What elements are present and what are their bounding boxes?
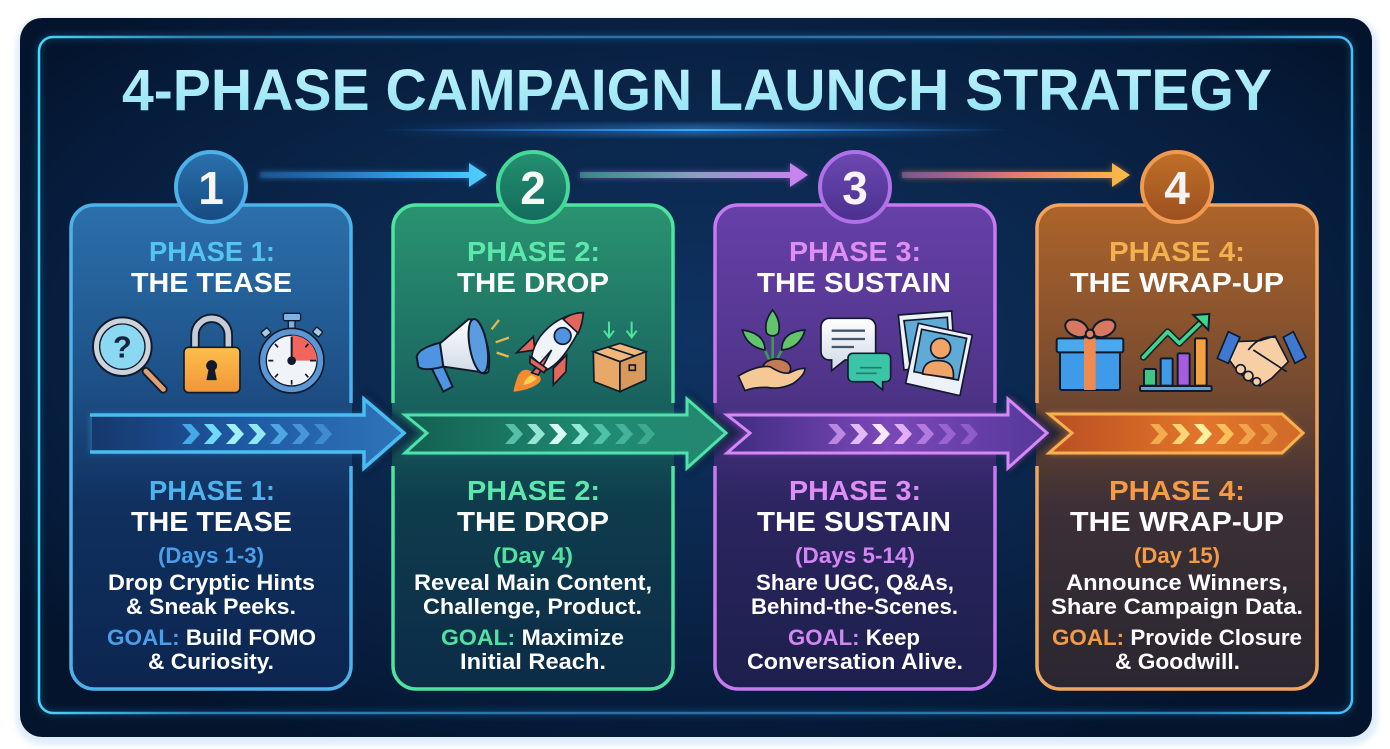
phase 1 details: GOAL: Build FOMO bbox=[107, 625, 316, 650]
icon: handshake bbox=[1217, 332, 1306, 386]
badge 3 bbox=[820, 152, 890, 222]
arrow band 2 bbox=[403, 392, 740, 476]
phase 4 details: PHASE 4: bbox=[1109, 475, 1245, 506]
phase 4 details: (Day 15) bbox=[1134, 543, 1220, 568]
phase 3 details: GOAL: Keep bbox=[788, 625, 920, 650]
panel: phase 1 bbox=[70, 152, 418, 690]
phase 3 details: Share UGC, Q&As, bbox=[756, 570, 954, 595]
phase 1 details: THE TEASE bbox=[131, 506, 292, 537]
phase 2 details: PHASE 2: bbox=[467, 475, 600, 506]
icon: gift bbox=[1057, 316, 1123, 390]
panel: phase 2 bbox=[392, 152, 740, 690]
phase 1 details: Drop Cryptic Hints bbox=[108, 570, 315, 595]
phase 1 details: (Days 1-3) bbox=[158, 543, 264, 568]
phase 2 details: (Day 4) bbox=[493, 543, 573, 568]
phase 1 details: PHASE 1: bbox=[149, 475, 275, 506]
panel: phase 4 bbox=[1036, 152, 1318, 690]
phase 4 details: Announce Winners, bbox=[1066, 570, 1288, 595]
card 3 bbox=[714, 204, 996, 690]
phase 4 details bbox=[1051, 475, 1303, 674]
icon: chat bubbles bbox=[821, 318, 891, 390]
panel: phase 3 bbox=[714, 152, 1062, 690]
phase 3 heading bbox=[757, 236, 951, 298]
arrow band 3 bbox=[726, 392, 1062, 476]
phase 1 heading: THE TEASE bbox=[131, 267, 292, 298]
badge 2: 2 bbox=[520, 162, 546, 214]
phase 4 heading bbox=[1070, 236, 1284, 298]
badge 2 bbox=[498, 152, 568, 222]
icon: padlock bbox=[184, 318, 240, 393]
phase 2 details: GOAL: Maximize bbox=[441, 625, 624, 650]
phase 3 details bbox=[747, 475, 963, 674]
badge 1: 1 bbox=[198, 162, 224, 214]
phase 2 details: THE DROP bbox=[457, 506, 609, 537]
phase 2 heading bbox=[457, 236, 609, 298]
card 4 bbox=[1036, 204, 1318, 690]
icon: rocket bbox=[513, 313, 583, 392]
icon: photos bbox=[898, 311, 972, 396]
phase 2 heading: THE DROP bbox=[457, 267, 609, 298]
icon: stopwatch bbox=[259, 313, 324, 393]
icon: megaphone bbox=[417, 318, 509, 392]
phase 3 heading: THE SUSTAIN bbox=[757, 267, 951, 298]
badge 4: 4 bbox=[1164, 162, 1190, 214]
phase 4 details: & Goodwill. bbox=[1115, 649, 1240, 674]
phase 4 details: THE WRAP-UP bbox=[1070, 506, 1284, 537]
phase 1 details bbox=[107, 475, 316, 674]
arrow band 1 bbox=[90, 392, 418, 476]
connector arrow 1 to 2 bbox=[260, 163, 487, 187]
phase 2 heading: PHASE 2: bbox=[467, 236, 600, 267]
phase 4 heading: PHASE 4: bbox=[1109, 236, 1245, 267]
phase 3 details: (Days 5-14) bbox=[795, 543, 915, 568]
phase 4 details: Share Campaign Data. bbox=[1051, 594, 1303, 619]
icon: magnifying glass bbox=[93, 317, 163, 389]
title: 4-PHASE CAMPAIGN LAUNCH STRATEGY bbox=[122, 58, 1272, 123]
phase 3 details: THE SUSTAIN bbox=[757, 506, 951, 537]
badge 1 bbox=[176, 152, 246, 222]
card 1 bbox=[70, 204, 352, 690]
phase 3 details: Conversation Alive. bbox=[747, 649, 963, 674]
phase 3 details: Behind-the-Scenes. bbox=[751, 594, 958, 619]
phase 2 details: Initial Reach. bbox=[460, 649, 606, 674]
icon: magnifying glass: ? bbox=[113, 330, 132, 364]
phase 2 details: Reveal Main Content, bbox=[414, 570, 652, 595]
phase 1 heading bbox=[131, 236, 292, 298]
icon: growth chart bbox=[1140, 314, 1212, 391]
phase 1 details: & Curiosity. bbox=[148, 649, 274, 674]
phase 1 details: & Sneak Peeks. bbox=[126, 594, 296, 619]
title underline bbox=[380, 124, 1010, 136]
phase 4 heading: THE WRAP-UP bbox=[1070, 267, 1284, 298]
arrow band 4 bbox=[1047, 413, 1303, 454]
card 2 bbox=[392, 204, 674, 690]
connector arrow 2 to 3 bbox=[580, 163, 808, 187]
badge 4 bbox=[1142, 152, 1212, 222]
icon: plant in hand bbox=[738, 310, 805, 391]
icon: package bbox=[593, 322, 646, 392]
connector arrow 3 to 4 bbox=[902, 163, 1130, 187]
phase 3 details: PHASE 3: bbox=[789, 475, 921, 506]
phase 2 details: Challenge, Product. bbox=[423, 594, 642, 619]
phase 1 heading: PHASE 1: bbox=[149, 236, 275, 267]
phase 3 heading: PHASE 3: bbox=[789, 236, 921, 267]
badge 3: 3 bbox=[842, 162, 868, 214]
phase 4 details: GOAL: Provide Closure bbox=[1052, 625, 1302, 650]
phase 2 details bbox=[414, 475, 652, 674]
